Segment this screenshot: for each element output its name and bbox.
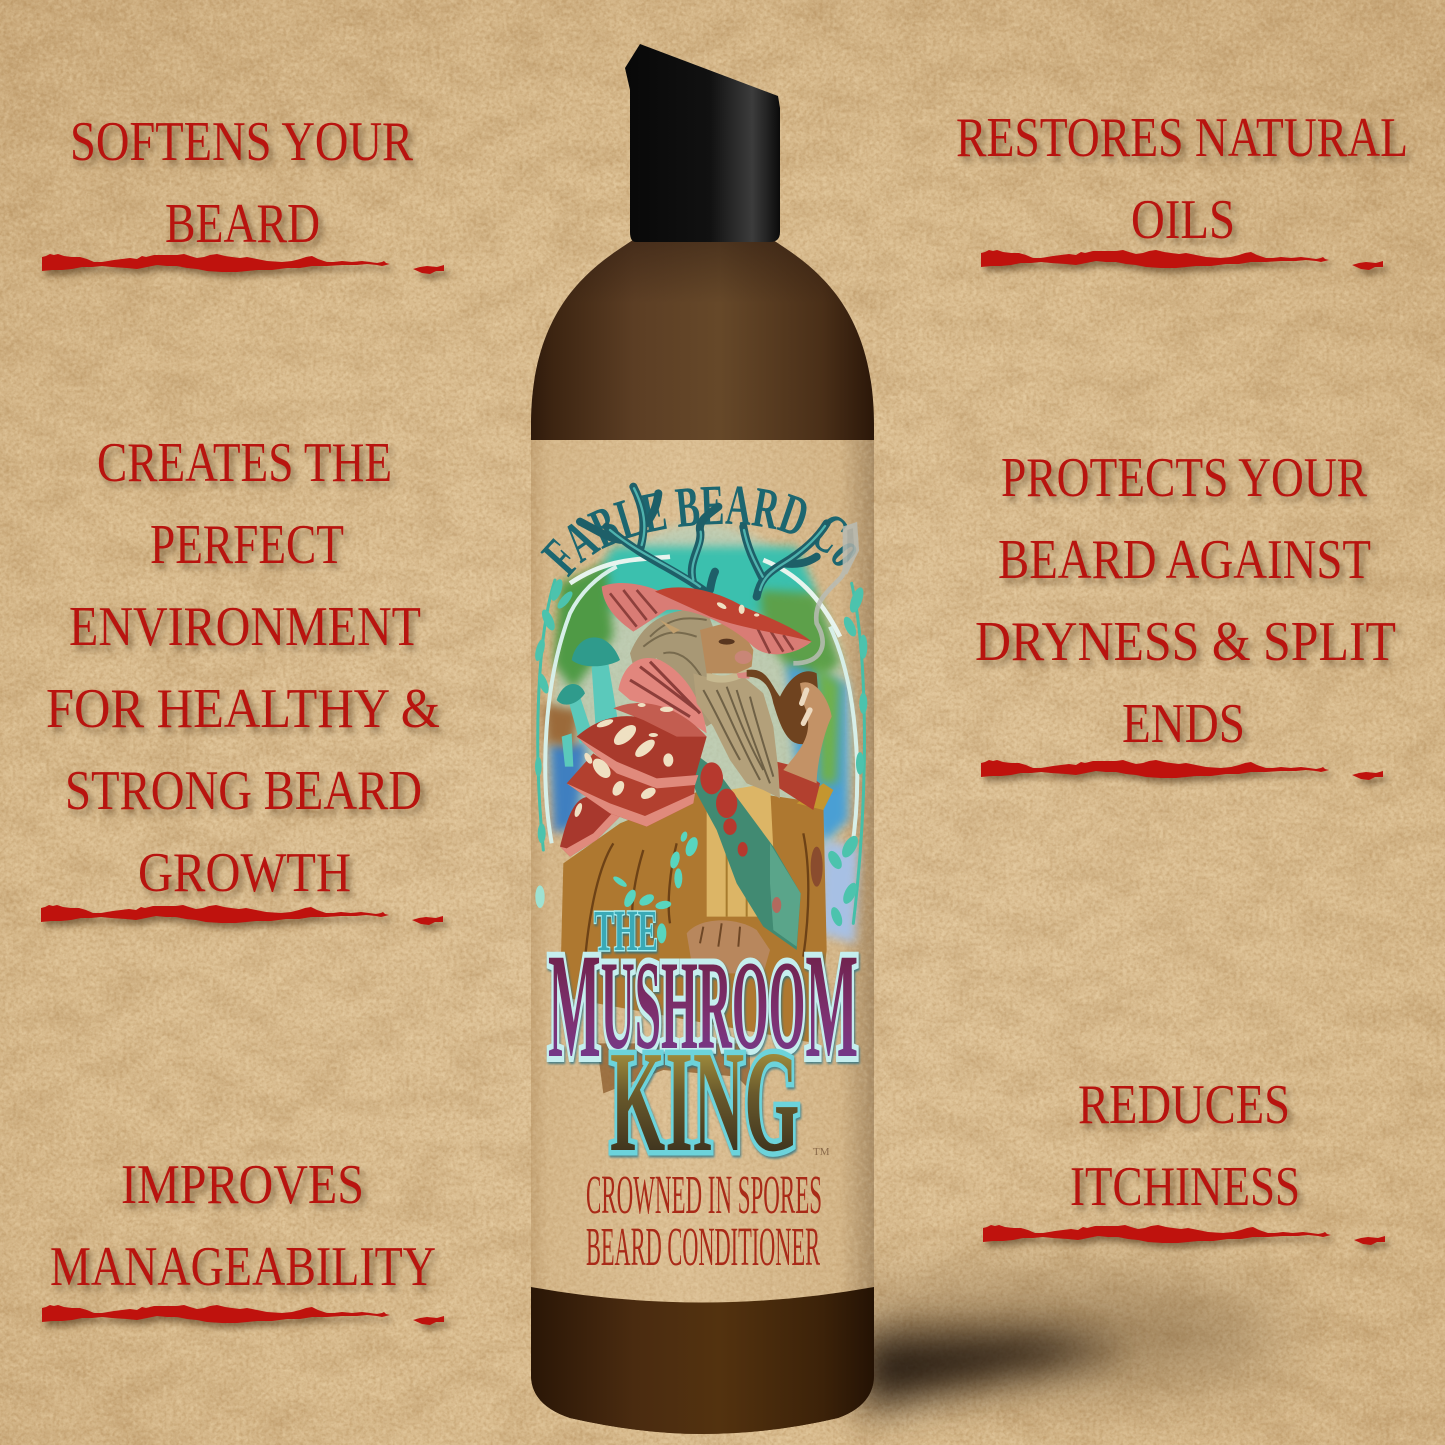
pipe smoke: [793, 525, 857, 663]
green sash: [677, 740, 801, 950]
mushroom shoulder caps: [560, 703, 820, 857]
benefit: reduces itchiness: [983, 1074, 1385, 1245]
benefit: creates the perfect environment: PERFECT: [150, 514, 344, 576]
benefit: creates the perfect environment: GROWTH: [138, 842, 351, 904]
vines and leaves: [533, 578, 867, 928]
antlers: [580, 487, 827, 597]
robe: [560, 783, 833, 1043]
product bottle: [531, 44, 874, 1434]
glowing teal mushrooms: [557, 637, 620, 767]
title word: mushroom: [548, 923, 858, 1089]
title word: mushroom: M: [805, 923, 858, 1089]
title word: king: KING: [610, 1020, 799, 1182]
face: [660, 620, 753, 679]
benefit: creates the perfect environment: ENVIRONMENT: [69, 596, 421, 658]
benefit: creates the perfect environment: STRONG BEARD: [65, 760, 422, 822]
title word: mushroom: M: [548, 923, 601, 1089]
pink mushroom collar: [618, 658, 707, 733]
benefit: reduces itchiness: ITCHINESS: [1070, 1156, 1300, 1218]
benefit: protects your beard: BEARD AGAINST: [998, 529, 1371, 591]
cream spots: [573, 703, 673, 818]
flip cap: [625, 44, 780, 242]
text: CROWNED IN SPORES: [586, 1164, 822, 1225]
benefit: improves manageability: [42, 1154, 444, 1325]
benefit: softens your beard: SOFTENS YOUR: [70, 111, 414, 173]
bottle ground shadow: [830, 1289, 1290, 1410]
brand arc text: FABLE BEARD Co: [540, 486, 856, 578]
title word: the: THE: [594, 899, 658, 963]
benefit: protects your beard: ENDS: [1122, 693, 1245, 755]
benefit: softens your beard: BEARD: [165, 193, 320, 255]
pipe and hand: [747, 670, 832, 783]
robe hem behind title: [597, 1043, 750, 1093]
long hair: [630, 610, 717, 727]
trademark mark: TM: [813, 1146, 830, 1158]
benefit: creates the perfect environment: [41, 432, 443, 925]
beard: [693, 667, 780, 798]
benefit: restores natural oils: [956, 107, 1408, 270]
benefit: restores natural oils: OILS: [1131, 189, 1235, 251]
benefit: reduces itchiness: REDUCES: [1078, 1074, 1290, 1136]
benefit: improves manageability: IMPROVES: [121, 1154, 364, 1216]
resting hand: [687, 920, 770, 973]
text: BEARD CONDITIONER: [586, 1216, 820, 1277]
title word: mushroom: USHROO: [601, 935, 805, 1076]
paper label: [531, 436, 874, 1316]
benefit: improves manageability: MANAGEABILITY: [50, 1236, 436, 1298]
benefit: creates the perfect environment: FOR HEALTHY &: [46, 678, 440, 740]
glowing spots on sleeve: [612, 831, 700, 943]
bottle body: [531, 238, 874, 1434]
mushroom hat: [602, 583, 812, 654]
benefit: creates the perfect environment: CREATES THE: [97, 432, 392, 494]
label illustration: mushroom king: [535, 482, 868, 1094]
benefit: protects your beard: [975, 447, 1396, 780]
benefit: softens your beard: [42, 111, 444, 274]
product name: [586, 1164, 822, 1277]
benefit: protects your beard: DRYNESS & SPLIT: [975, 611, 1396, 673]
benefit: protects your beard: PROTECTS YOUR: [1001, 447, 1368, 509]
glowing forest backdrop: [543, 523, 858, 950]
